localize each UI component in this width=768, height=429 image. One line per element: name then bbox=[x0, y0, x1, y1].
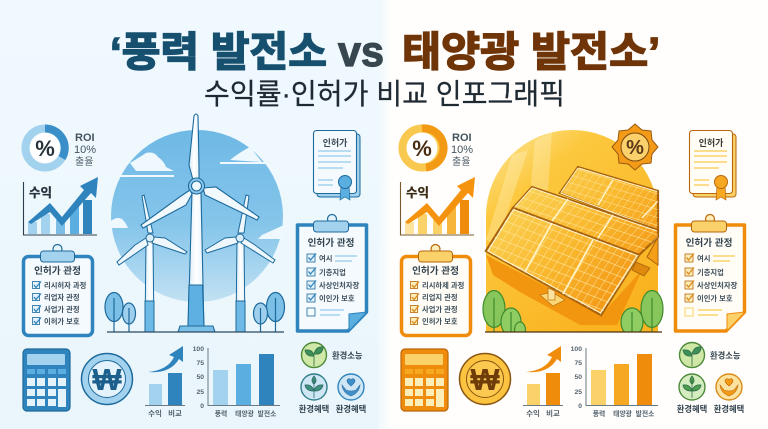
ROI donut: % bbox=[412, 136, 432, 161]
eco icons bbox=[677, 342, 744, 414]
bar chart: 25 bbox=[196, 389, 204, 396]
ROI donut: 10% bbox=[74, 144, 96, 156]
rate badge: % bbox=[626, 137, 644, 159]
clipboard: permit steps: 리업지 관정 bbox=[422, 293, 458, 302]
bar chart: 100 bbox=[571, 346, 582, 353]
rear panel row bbox=[560, 167, 658, 230]
background: soft seam bbox=[378, 0, 392, 429]
certificate bbox=[314, 130, 360, 200]
calculator bbox=[401, 349, 448, 411]
bar chart: 태양광 bbox=[235, 409, 255, 418]
bar chart bbox=[193, 346, 280, 418]
title bbox=[110, 28, 660, 76]
title: 태양광 발전소’ bbox=[402, 29, 660, 75]
small profit bars bbox=[145, 346, 185, 418]
clipboard: permit checklist: 사상인처자장 bbox=[319, 281, 360, 290]
panel shadow bbox=[486, 255, 642, 325]
bar chart: 100 bbox=[193, 346, 204, 353]
clipboard: permit steps bbox=[24, 244, 92, 336]
clipboard: permit checklist: 이인가 보호 bbox=[697, 294, 733, 303]
certificate: 인허가 bbox=[323, 137, 348, 148]
clouds bbox=[108, 147, 284, 239]
clipboard: permit checklist: 기층지업 bbox=[319, 268, 346, 277]
subtitle: 수익률·인허가 비교 인포그래픽 bbox=[204, 78, 565, 111]
profit growth chart: 수익 bbox=[406, 186, 429, 200]
clipboard: permit checklist: 인허가 관정 bbox=[686, 237, 732, 249]
background: solar side bbox=[386, 0, 768, 429]
far right panel piece bbox=[647, 237, 658, 265]
ROI donut: 10% bbox=[451, 144, 473, 156]
profit growth chart bbox=[24, 177, 98, 235]
clipboard: permit steps: 리업자 관정 bbox=[44, 293, 80, 302]
eco icons: 환경소능 bbox=[332, 350, 363, 360]
sky circle bbox=[111, 130, 283, 302]
ROI donut bbox=[402, 128, 473, 168]
ROI donut: ROI bbox=[75, 132, 95, 144]
clipboard: permit steps: 인허가 관정 bbox=[34, 265, 81, 277]
small profit bars: 수익 bbox=[526, 408, 540, 418]
panel stand bbox=[540, 288, 565, 306]
bar chart: 태양광 bbox=[613, 409, 633, 418]
ROI donut bbox=[26, 128, 96, 168]
middle panel row bbox=[513, 187, 658, 255]
clipboard: permit checklist: 여시 bbox=[697, 254, 710, 263]
eco icons: 환경혜택 bbox=[714, 404, 744, 414]
profit growth chart: 수익 bbox=[29, 186, 52, 200]
bar chart: 발전소 bbox=[636, 409, 654, 418]
profit growth chart bbox=[400, 177, 475, 235]
eco icons bbox=[299, 342, 366, 414]
trees bbox=[482, 290, 664, 332]
right small turbine bbox=[205, 195, 275, 332]
clipboard: permit checklist: 인허가 관정 bbox=[308, 237, 354, 249]
bar chart bbox=[571, 346, 658, 418]
bar chart: 풍력 bbox=[215, 409, 227, 418]
sun rays bbox=[486, 132, 552, 244]
clipboard: permit checklist: 여시 bbox=[319, 254, 332, 263]
front panel row bbox=[486, 208, 639, 315]
calculator bbox=[23, 349, 70, 411]
clipboard: permit checklist: 기층지업 bbox=[697, 268, 724, 277]
background: wind side bbox=[0, 0, 386, 429]
clipboard: permit steps: 사업가 관정 bbox=[422, 305, 458, 314]
certificate: 인허가 bbox=[699, 137, 724, 148]
clipboard: permit checklist: 사상인처자장 bbox=[697, 281, 738, 290]
bar chart: 75 bbox=[574, 360, 582, 367]
bar chart: 75 bbox=[196, 360, 204, 367]
title: vs bbox=[338, 28, 384, 76]
ROI donut: 출율 bbox=[75, 156, 93, 168]
small profit bars: 수익 bbox=[148, 408, 162, 418]
sun backdrop bbox=[486, 130, 658, 332]
small profit bars: 비교 bbox=[546, 408, 560, 418]
right back stand bbox=[632, 262, 650, 276]
bar chart: 0 bbox=[578, 403, 582, 410]
wind side components bbox=[23, 128, 367, 418]
clipboard: permit steps: 인허가 관정 bbox=[412, 265, 459, 277]
bar chart: 25 bbox=[574, 389, 582, 396]
ground line bbox=[107, 331, 284, 333]
won coin bbox=[460, 354, 510, 404]
rate badge bbox=[612, 124, 658, 170]
won coin: ₩ bbox=[92, 362, 122, 397]
trees bbox=[105, 292, 284, 332]
eco icons: 환경혜택 bbox=[677, 404, 707, 414]
won coin: ₩ bbox=[470, 362, 500, 397]
clipboard: permit checklist: 이인가 보호 bbox=[319, 294, 355, 303]
bar chart: 풍력 bbox=[593, 409, 605, 418]
certificate bbox=[690, 130, 736, 200]
scene: wind turbines bbox=[105, 114, 284, 332]
title: ‘풍력 발전소 bbox=[110, 29, 327, 75]
bar chart: 50 bbox=[196, 374, 204, 381]
won coin bbox=[82, 354, 132, 404]
clipboard: permit steps bbox=[402, 244, 470, 336]
bar chart: 50 bbox=[574, 374, 582, 381]
scene: solar panels bbox=[483, 124, 663, 338]
clipboard: permit checklist bbox=[298, 214, 367, 331]
left small turbine bbox=[117, 195, 187, 332]
eco icons: 환경소능 bbox=[710, 350, 741, 360]
clipboard: permit steps: 리시허자 과정 bbox=[44, 281, 86, 290]
clipboard: permit steps: 사업가 관정 bbox=[44, 305, 80, 314]
bar chart: 발전소 bbox=[258, 409, 276, 418]
ROI donut: % bbox=[35, 136, 55, 161]
main turbine bbox=[141, 114, 259, 332]
small profit bars bbox=[523, 346, 563, 418]
clipboard: permit checklist bbox=[676, 214, 745, 331]
bar chart: 0 bbox=[200, 403, 204, 410]
ground line bbox=[485, 331, 662, 333]
ROI donut: ROI bbox=[452, 132, 472, 144]
ROI donut: 출율 bbox=[452, 156, 470, 168]
eco icons: 환경혜택 bbox=[336, 404, 366, 414]
eco icons: 환경혜택 bbox=[299, 404, 329, 414]
clipboard: permit steps: 리시하제 과정 bbox=[422, 281, 464, 290]
small profit bars: 비교 bbox=[168, 408, 182, 418]
clipboard: permit steps: 인허가 보호 bbox=[422, 317, 458, 326]
clipboard: permit steps: 이허가 보호 bbox=[44, 317, 80, 326]
solar side components bbox=[400, 128, 745, 418]
